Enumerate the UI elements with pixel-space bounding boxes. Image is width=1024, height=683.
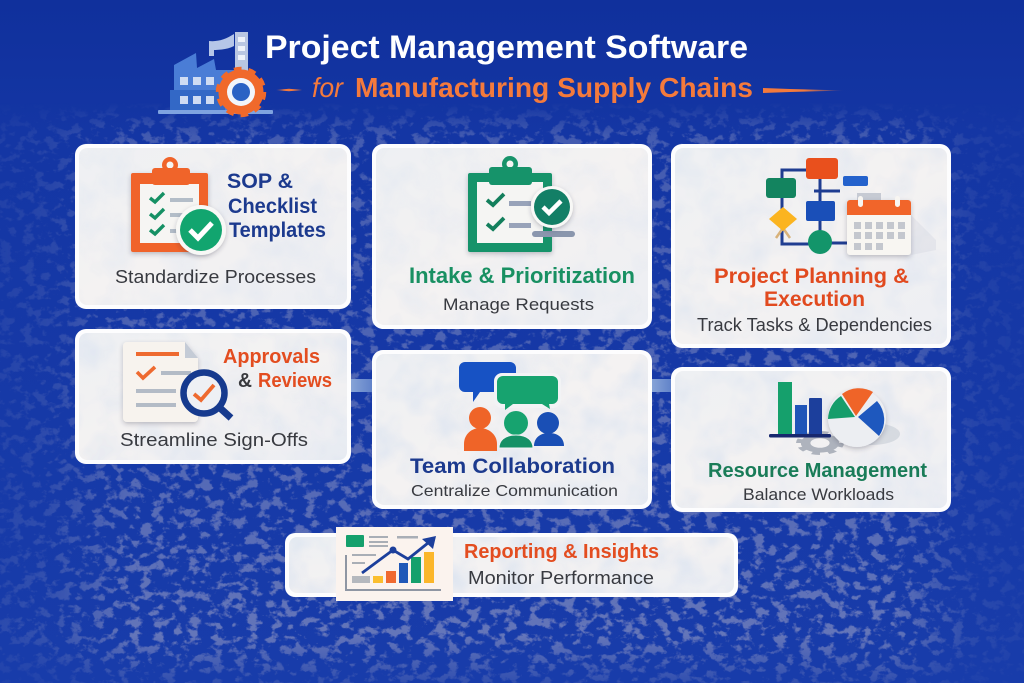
heading: Execution <box>764 288 865 311</box>
panel: Team Collaboration <box>372 350 652 509</box>
text: description: Track Tasks & Dependencies <box>697 315 932 335</box>
icon: report with rising chart <box>336 527 453 601</box>
icon: bar chart, pie chart and gear <box>769 382 900 453</box>
panel: Project Planning & Execution <box>671 144 951 348</box>
text: description: Standardize Processes <box>115 267 316 287</box>
heading: main title: Project Management Software <box>265 29 748 65</box>
heading: Approvals <box>223 346 320 368</box>
icon: document with magnifier <box>123 342 231 422</box>
panel: Approvals & Reviews <box>75 329 351 464</box>
heading: SOP & <box>227 170 293 193</box>
heading: & <box>238 370 252 392</box>
heading: Resource Management <box>708 460 927 482</box>
heading: Reporting & Insights <box>464 541 659 563</box>
text: description: Balance Workloads <box>743 485 894 504</box>
icon: gear <box>218 70 264 114</box>
icon: flowchart and calendar <box>766 158 936 255</box>
panel: Intake & Prioritization <box>372 144 652 329</box>
panel: SOP & Checklist Templates <box>75 144 351 309</box>
heading: Reviews <box>258 370 332 392</box>
heading <box>223 346 332 392</box>
title block <box>158 29 845 114</box>
icon: speech bubbles and people <box>459 362 564 451</box>
text: description: Streamline Sign-Offs <box>120 430 308 450</box>
text: description: Manage Requests <box>443 295 594 314</box>
icon: orange clipboard <box>131 157 226 255</box>
connectors <box>349 379 673 392</box>
heading: Team Collaboration <box>410 455 615 478</box>
heading: subtitle <box>276 72 845 103</box>
icon: green clipboard <box>468 156 575 252</box>
heading: Project Planning & <box>714 265 909 288</box>
heading: subtitle: for <box>312 72 345 103</box>
text: description: Centralize Communication <box>411 483 618 500</box>
panel: Reporting & Insights <box>285 527 738 601</box>
heading <box>227 170 326 242</box>
heading: subtitle: Manufacturing Supply Chains <box>355 72 753 103</box>
heading: Checklist <box>228 195 317 218</box>
heading: Templates <box>229 219 326 242</box>
panel: Resource Management <box>671 367 951 512</box>
icon: factory with gear <box>158 32 273 114</box>
text: description: Monitor Performance <box>468 568 654 588</box>
heading <box>714 265 909 311</box>
heading: Intake & Prioritization <box>409 263 635 288</box>
